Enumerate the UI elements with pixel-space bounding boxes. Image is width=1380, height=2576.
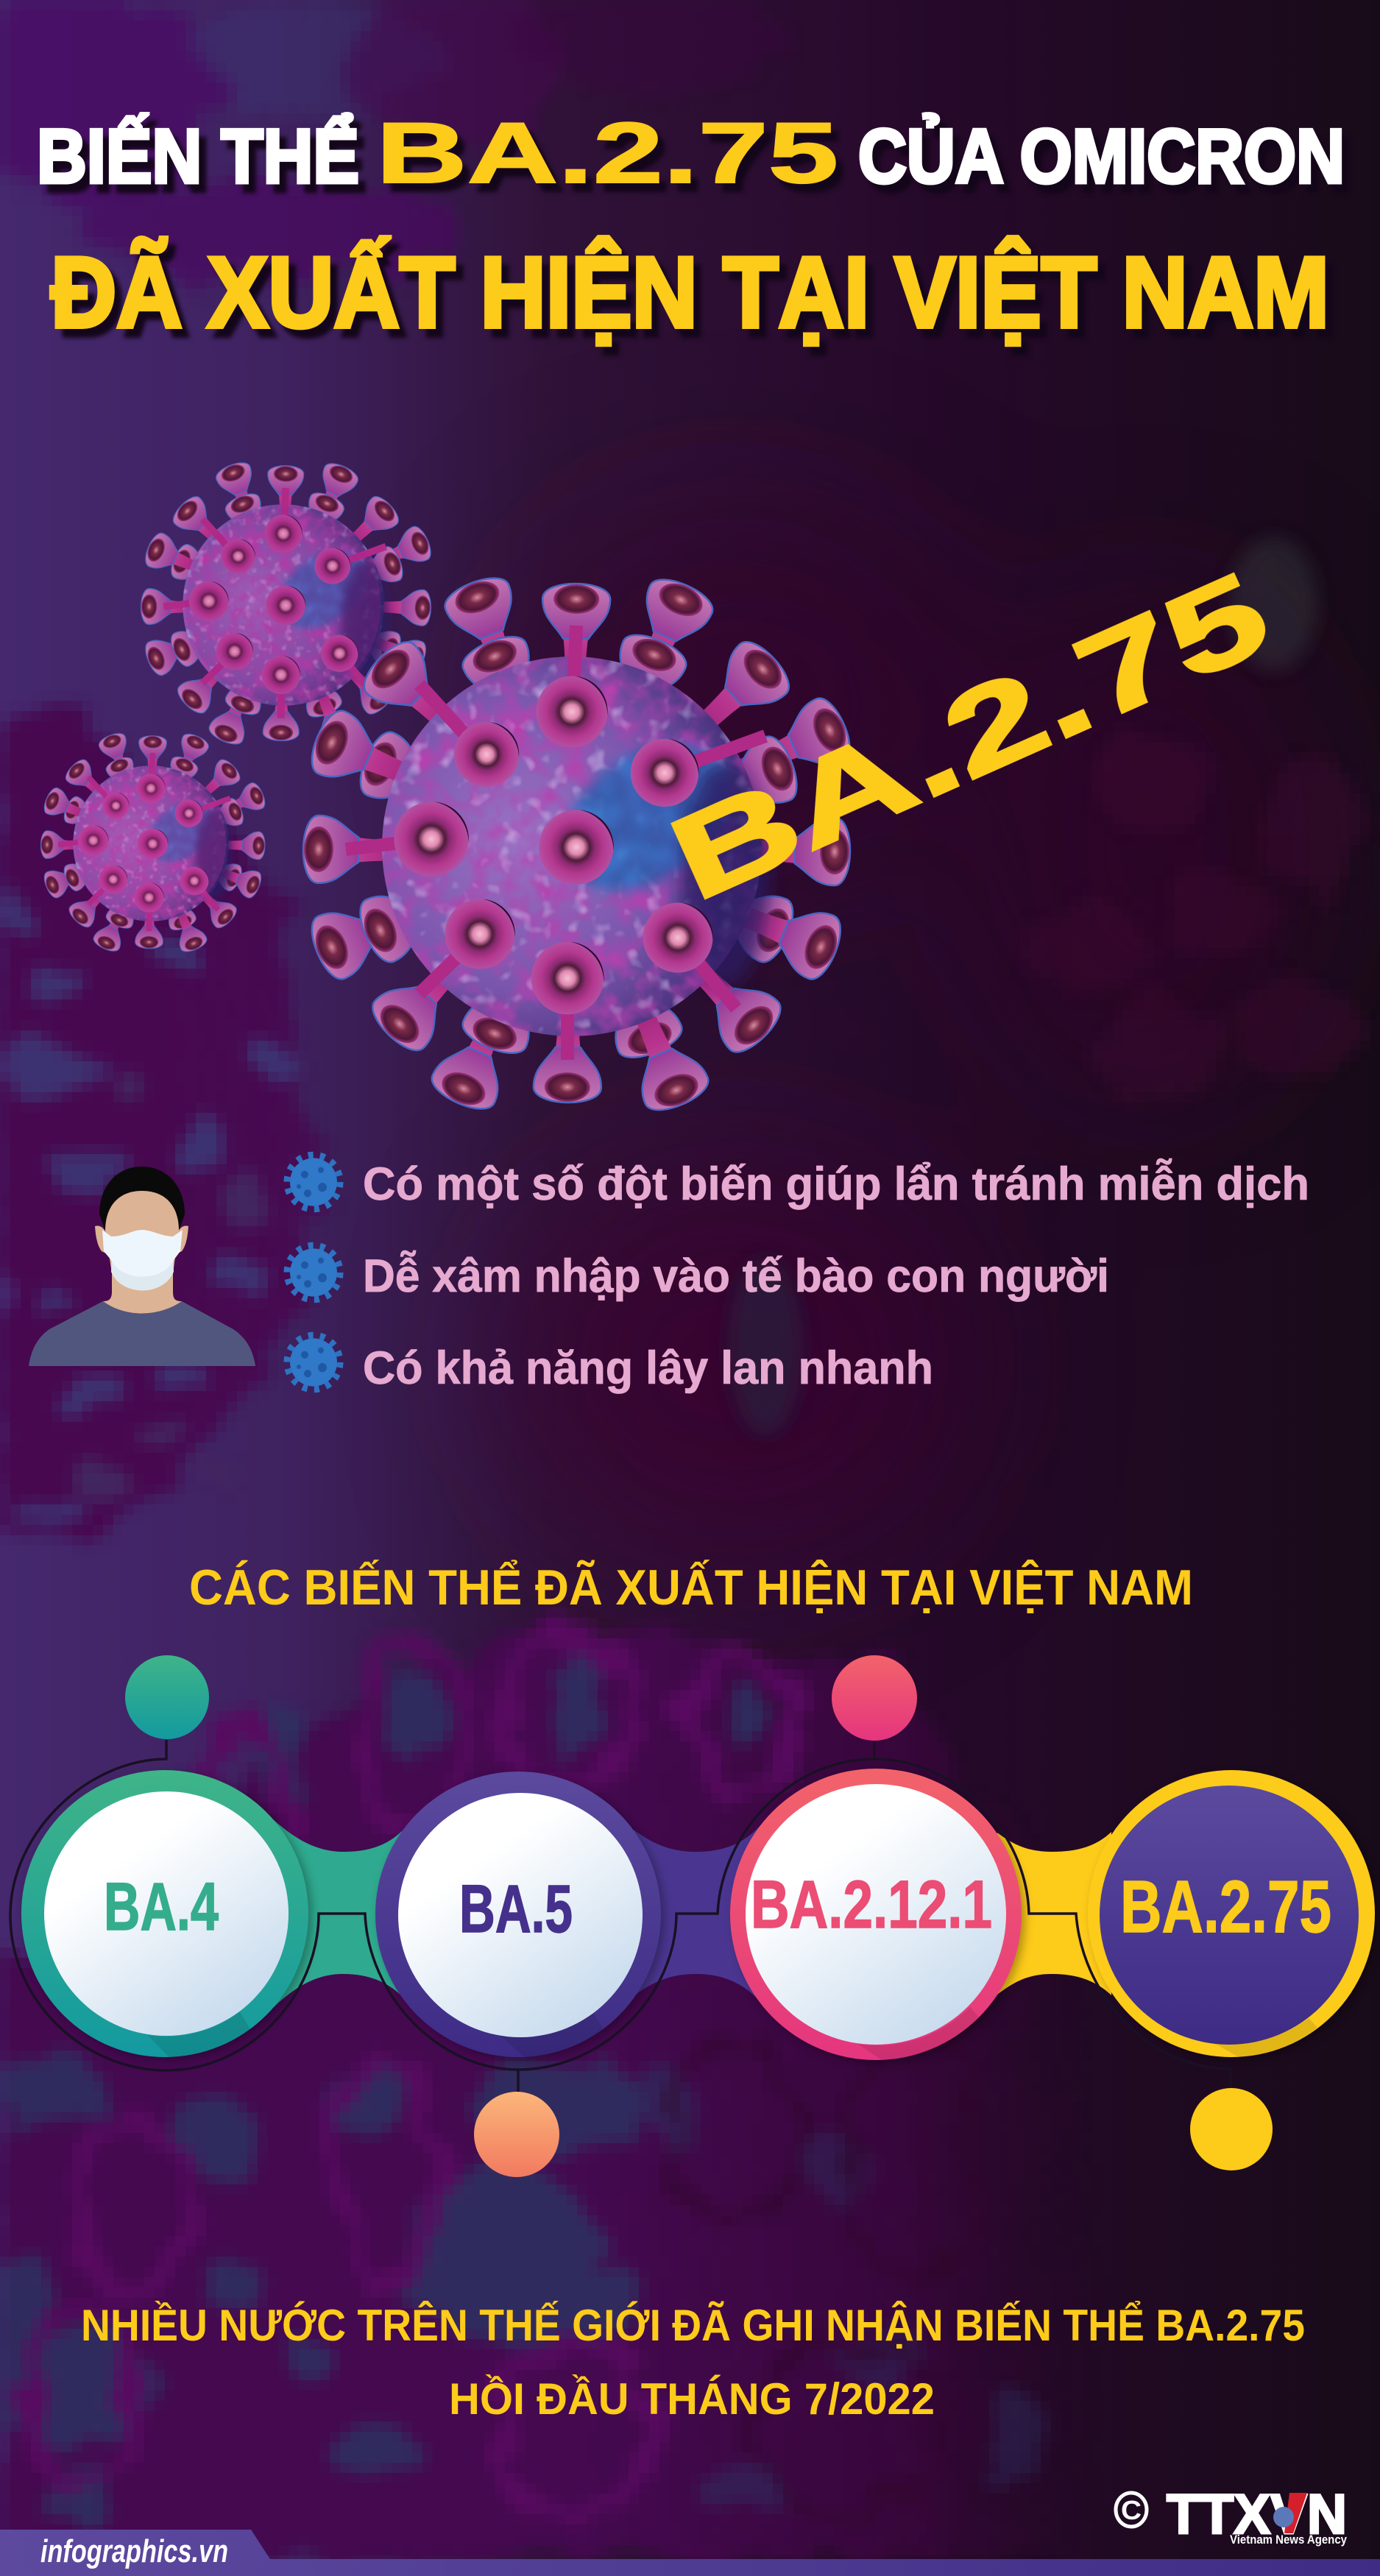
ring: BA.2.12.1 — [730, 1769, 1022, 2060]
icon: blue virus — [287, 1155, 340, 1209]
icon: blue virus — [287, 1245, 340, 1300]
footer band: infographics.vn — [40, 2533, 228, 2569]
variant chain — [10, 1655, 1375, 2177]
connector: yellow — [997, 1832, 1111, 1995]
bottom magenta ribbon mass — [0, 1627, 1097, 2559]
label: BA.2.75 rotated: BA.2.75 — [652, 546, 1287, 925]
bullet 1: Có một số đột biến giúp lẩn tránh miễn dịch — [363, 1158, 1309, 1210]
ring: BA.2.12.1: BA.2.12.1 — [751, 1867, 992, 1942]
logo: TTXVN: C — [1121, 2495, 1142, 2525]
bullet 2: Dễ xâm nhập vào tế bào con người — [363, 1250, 1109, 1302]
icon: person with mask — [29, 1167, 255, 1366]
title line 1: BA.2.75 — [376, 105, 838, 201]
virus illustration: small — [40, 730, 268, 955]
section heading: CÁC BIẾN THỂ ĐÃ XUẤT HIỆN TẠI VIỆT NAM — [189, 1559, 1193, 1616]
bullet 3: Có khả năng lây lan nhanh — [363, 1342, 933, 1394]
connector: purple — [634, 1824, 762, 2003]
closing statement: NHIỀU NƯỚC TRÊN THẾ GIỚI ĐÃ GHI NHẬN BIẾN THỂ BA.2.75 — [81, 2301, 1305, 2350]
logo: TTXVN: TTXVN — [1167, 2483, 1347, 2546]
ring: BA.5 — [375, 1772, 661, 2057]
ring: BA.5: BA.5 — [459, 1872, 573, 1947]
dot: red — [832, 1655, 917, 1741]
dot: green — [125, 1655, 209, 1739]
title line 1 — [37, 105, 1345, 201]
icon: blue virus — [287, 1335, 340, 1390]
ring: BA.2.75 — [1088, 1770, 1375, 2057]
closing statement: HỒI ĐẦU THÁNG 7/2022 — [449, 2374, 935, 2424]
connector: green — [273, 1819, 402, 2008]
ring: BA.4 — [21, 1770, 308, 2057]
virus illustration: large — [302, 571, 857, 1118]
connector line — [10, 1740, 1231, 2092]
logo: TTXVN: Vietnam News Agency — [1230, 2533, 1347, 2547]
closing statement — [81, 2301, 1305, 2424]
virus illustration: medium — [141, 459, 435, 749]
top blotches — [0, 0, 213, 206]
upper right faint cells — [1030, 736, 1362, 1097]
left magenta ribbon mass — [0, 707, 331, 1538]
title line 1: BIẾN THỂ — [37, 113, 359, 199]
footer band — [0, 2530, 1380, 2576]
dot: yellow — [1190, 2088, 1273, 2170]
dot: orange — [474, 2092, 559, 2177]
ring: BA.4: BA.4 — [104, 1869, 219, 1945]
